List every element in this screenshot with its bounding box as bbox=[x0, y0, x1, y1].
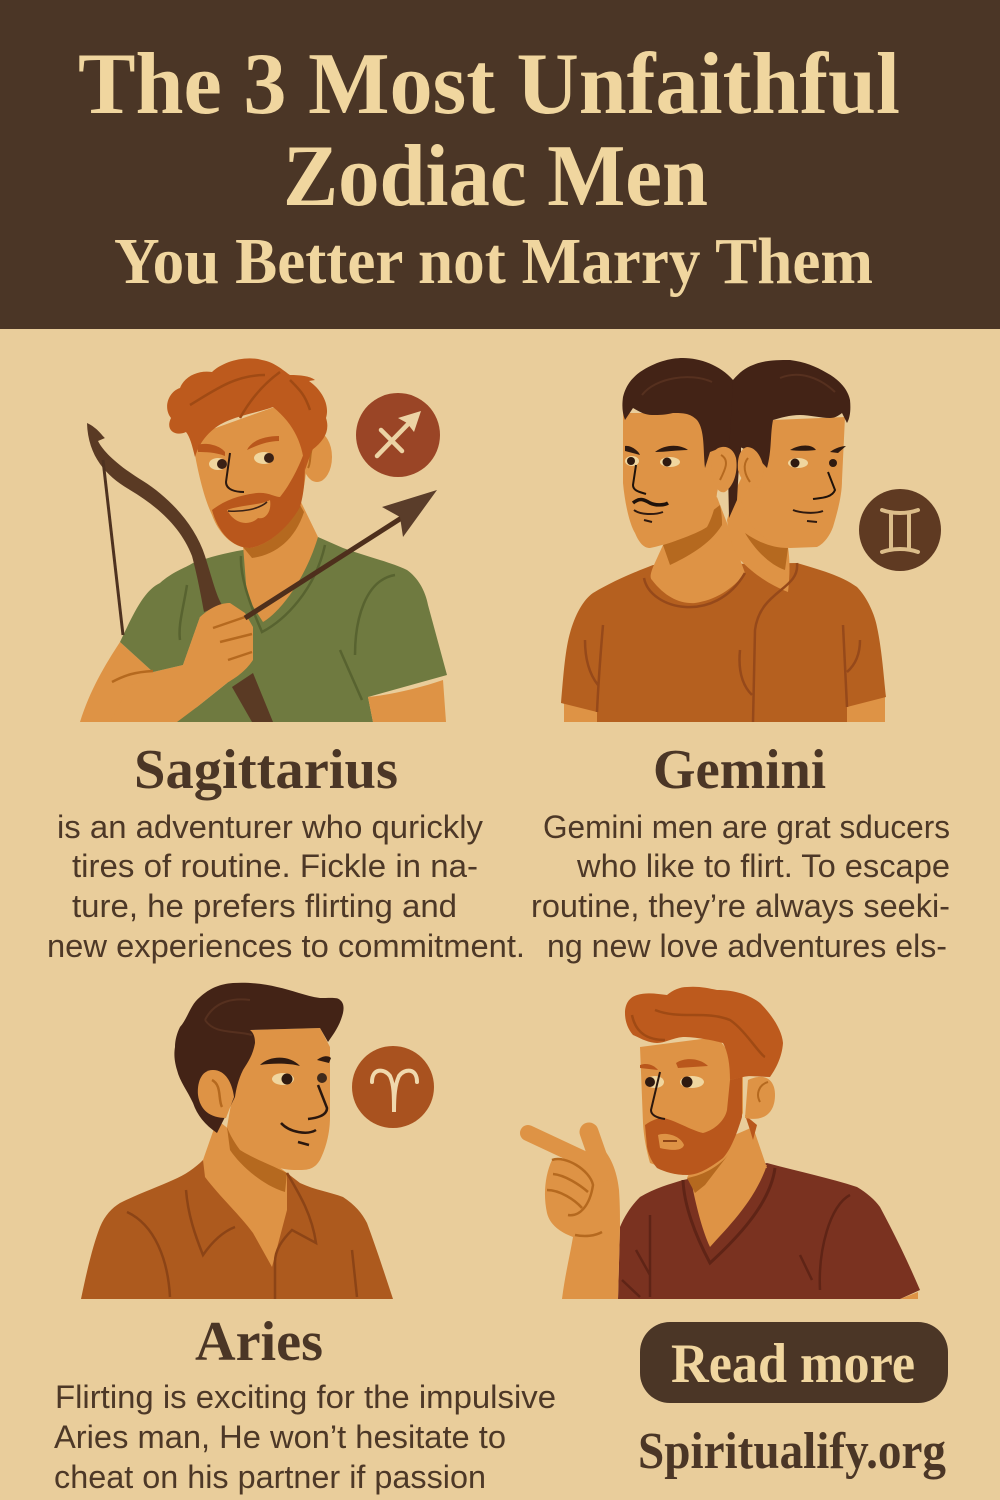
illustration: bearded man pointing bbox=[528, 987, 920, 1299]
subtitle: You Better not Marry Them bbox=[114, 225, 873, 298]
illustration: Aries man bbox=[81, 983, 393, 1299]
title line 2: Zodiac Men bbox=[283, 128, 708, 225]
panel: Sagittarius bbox=[47, 358, 525, 964]
text: Sagittarius description bbox=[47, 809, 525, 964]
header banner bbox=[0, 0, 1000, 329]
text: Aries description: Flirting is exciting for the impulsive bbox=[55, 1379, 556, 1415]
text: Gemini description: ng new love adventures els- bbox=[547, 928, 947, 964]
text: Sagittarius description: is an adventurer who qurickly bbox=[57, 809, 483, 845]
text: Gemini description: who like to flirt. To escape bbox=[576, 848, 950, 884]
text: Sagittarius description: new experiences to commitment. bbox=[47, 928, 525, 964]
panel: Aries bbox=[54, 983, 556, 1495]
heading: Gemini: Gemini bbox=[653, 739, 826, 801]
icon: Aries symbol bbox=[352, 1046, 434, 1128]
text: Gemini description bbox=[531, 809, 950, 964]
heading: Aries: Aries bbox=[195, 1311, 323, 1373]
button: Read more: Read more bbox=[671, 1333, 915, 1395]
text: Aries description: cheat on his partner if passion bbox=[54, 1459, 486, 1495]
text: Sagittarius description: ture, he prefers flirting and bbox=[72, 888, 457, 924]
button: Read more bbox=[640, 1322, 948, 1403]
icon: Gemini symbol bbox=[859, 489, 941, 571]
text: Gemini description: routine, they’re always seeki- bbox=[531, 888, 950, 924]
heading: Sagittarius: Sagittarius bbox=[134, 739, 398, 801]
icon: Sagittarius symbol bbox=[356, 393, 440, 477]
illustration: two-faced Gemini man bbox=[561, 358, 886, 722]
panel: Gemini bbox=[531, 358, 950, 964]
text: Aries description bbox=[54, 1379, 556, 1495]
brand: Spiritualify.org: Spiritualify.org bbox=[638, 1423, 946, 1480]
illustration: Sagittarius man with bow bbox=[80, 358, 447, 722]
title line 1: The 3 Most Unfaithful bbox=[78, 36, 900, 133]
text: Gemini description: Gemini men are grat sducers bbox=[543, 809, 950, 845]
text: Aries description: Aries man, He won’t hesitate to bbox=[54, 1419, 506, 1455]
text: Sagittarius description: tires of routine. Fickle in na- bbox=[72, 848, 478, 884]
